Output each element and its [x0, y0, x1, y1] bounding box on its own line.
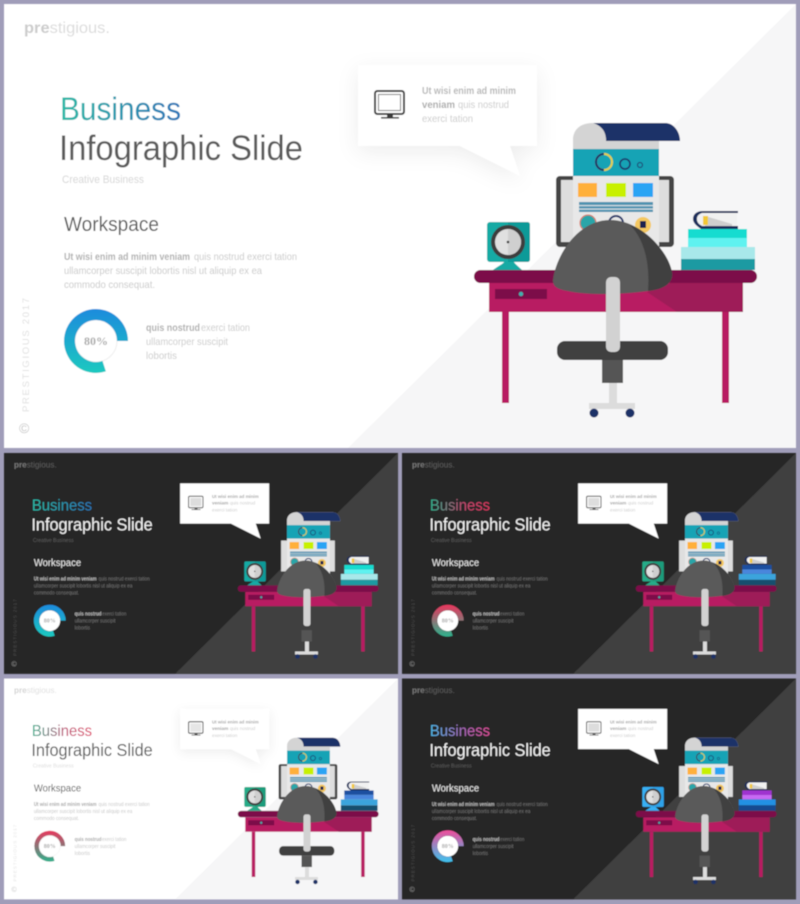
bubble text: Ut wisi enim ad minim — [610, 719, 657, 725]
diagonal background panel — [175, 678, 398, 899]
icon: monitor — [587, 496, 601, 510]
donut caption — [473, 837, 524, 857]
slide 3: dark red-green slide — [402, 453, 796, 674]
title: Business: Business — [430, 723, 490, 740]
subtitle: Creative Business — [431, 538, 472, 544]
title: Business: Business — [32, 723, 92, 740]
copyright mark: © — [19, 420, 30, 436]
donut caption: lobortis — [473, 851, 488, 857]
heading: Workspace: Workspace — [34, 558, 82, 569]
title: Business: Business — [430, 498, 490, 515]
bubble text: Ut wisi enim ad minim — [610, 494, 657, 500]
slide 5: dark pink-blue slide — [402, 678, 796, 899]
donut chart 80% — [70, 315, 122, 368]
slide 1: large light slide — [4, 4, 796, 448]
bubble text: quis nostrud — [230, 726, 255, 732]
donut chart 80% — [37, 607, 63, 634]
bubble text: quis nostrud — [628, 726, 653, 732]
illustration: desk, computer, chair, clock and books — [238, 512, 379, 659]
body paragraph: quis nostrud exerci tation — [497, 802, 548, 808]
icon: monitor — [375, 91, 404, 119]
body paragraph — [34, 802, 150, 822]
illustration: desk, computer, chair, clock and books — [636, 738, 777, 884]
body paragraph: commodo consequat. — [432, 590, 477, 596]
copyright mark: © — [409, 886, 415, 894]
donut caption: ullamcorper suscipit — [75, 619, 116, 625]
illustration: desk, computer, chair, clock and books — [636, 512, 777, 659]
slide background — [402, 453, 796, 674]
diagonal background panel — [573, 678, 796, 899]
bubble text: exerci tation — [610, 508, 636, 514]
donut caption — [473, 612, 524, 632]
copyright mark: © — [409, 660, 415, 668]
logo: prestigious. — [412, 686, 455, 695]
bubble text — [212, 719, 259, 739]
title: Infographic Slide: Infographic Slide — [31, 740, 153, 760]
donut caption — [75, 837, 126, 857]
bubble text: veniam — [212, 726, 229, 732]
bubble text: quis nostrud — [628, 501, 653, 507]
speech bubble — [358, 65, 537, 176]
body paragraph: Ut wisi enim ad minim veniam — [432, 576, 495, 582]
body paragraph — [34, 576, 150, 596]
vertical side label: PRESTIGIOUS 2017 — [410, 599, 416, 656]
body paragraph: quis nostrud exerci tation — [194, 251, 297, 263]
donut caption — [146, 322, 250, 362]
donut caption: quis nostrud — [75, 837, 102, 843]
vertical side label: PRESTIGIOUS 2017 — [410, 824, 416, 881]
logo: prestigious. — [412, 460, 455, 469]
body paragraph — [432, 576, 548, 596]
body paragraph: commodo consequat. — [432, 816, 477, 822]
donut caption: lobortis — [473, 626, 488, 632]
heading: Workspace: Workspace — [64, 214, 159, 236]
donut caption: quis nostrud — [473, 612, 500, 618]
speech bubble — [578, 483, 667, 539]
donut caption: ullamcorper suscipit — [473, 844, 514, 850]
donut caption: quis nostrud — [146, 322, 200, 334]
slide background — [402, 678, 796, 899]
donut caption: exerci tation — [500, 837, 524, 843]
donut caption: lobortis — [146, 350, 177, 362]
body paragraph: quis nostrud exerci tation — [99, 576, 150, 582]
donut caption: exerci tation — [102, 837, 126, 843]
vertical side label: PRESTIGIOUS 2017 — [12, 824, 18, 881]
donut caption: ullamcorper suscipit — [75, 844, 116, 850]
bubble text: exerci tation — [212, 508, 238, 514]
subtitle: Creative Business — [431, 764, 472, 770]
donut chart 80%: 80% — [84, 334, 108, 348]
donut chart 80%: 80% — [44, 844, 56, 850]
slide background — [4, 4, 796, 448]
body paragraph: ullamcorper suscipit lobortis nisl ut aliquip ex ea — [64, 265, 262, 277]
logo: prestigious. — [24, 20, 110, 37]
icon: monitor — [587, 722, 601, 736]
bubble text — [212, 494, 259, 514]
bubble text: Ut wisi enim ad minim — [212, 494, 259, 500]
body paragraph: quis nostrud exerci tation — [99, 802, 150, 808]
donut caption: exerci tation — [201, 322, 250, 334]
bubble text — [610, 494, 657, 514]
bubble text: Ut wisi enim ad minim — [422, 86, 516, 97]
speech bubble — [578, 709, 667, 764]
bubble text: veniam — [610, 726, 627, 732]
subtitle: Creative Business — [33, 538, 74, 544]
donut caption: ullamcorper suscipit — [146, 336, 228, 348]
body paragraph: Ut wisi enim ad minim veniam — [64, 251, 190, 263]
copyright mark: © — [11, 886, 17, 894]
logo: prestigious. — [14, 686, 57, 695]
body paragraph: quis nostrud exerci tation — [497, 576, 548, 582]
subtitle: Creative Business — [33, 764, 74, 770]
donut caption — [75, 612, 126, 632]
donut chart 80%: 80% — [442, 844, 454, 850]
title: Infographic Slide: Infographic Slide — [429, 740, 551, 760]
bubble text: Ut wisi enim ad minim — [212, 719, 259, 725]
body paragraph: Ut wisi enim ad minim veniam — [34, 576, 97, 582]
slide 2: dark teal slide — [4, 453, 398, 674]
slide background — [4, 678, 398, 899]
body paragraph: commodo consequat. — [34, 816, 79, 822]
slide background — [4, 453, 398, 674]
body paragraph: Ut wisi enim ad minim veniam — [432, 802, 495, 808]
bubble text: veniam — [422, 100, 455, 111]
diagonal background panel — [573, 453, 796, 674]
bubble text: quis nostrud — [458, 100, 509, 111]
donut chart 80%: 80% — [44, 619, 56, 625]
heading: Workspace: Workspace — [432, 558, 480, 569]
donut chart 80% — [435, 607, 461, 634]
bubble text — [422, 86, 516, 125]
body paragraph — [64, 251, 297, 291]
donut caption: quis nostrud — [75, 612, 102, 618]
donut caption: quis nostrud — [473, 837, 500, 843]
diagonal background panel — [348, 4, 796, 448]
slide 4: light red-green slide — [4, 678, 398, 899]
bubble text — [610, 719, 657, 739]
donut caption: ullamcorper suscipit — [473, 619, 514, 625]
title: Business: Business — [60, 91, 181, 127]
illustration: desk, computer, chair, clock and books — [238, 738, 379, 884]
bubble text: veniam — [212, 501, 229, 507]
donut caption: exerci tation — [102, 612, 126, 618]
bubble text: exerci tation — [212, 733, 238, 739]
title: Business: Business — [32, 498, 92, 515]
vertical side label: PRESTIGIOUS 2017 — [21, 298, 32, 412]
body paragraph: commodo consequat. — [34, 590, 79, 596]
icon: monitor — [189, 496, 203, 510]
copyright mark: © — [11, 660, 17, 668]
heading: Workspace: Workspace — [34, 783, 82, 794]
speech bubble — [180, 483, 269, 539]
body paragraph: ullamcorper suscipit lobortis nisl ut aliquip ex ea — [432, 809, 530, 815]
title: Infographic Slide: Infographic Slide — [59, 129, 303, 168]
body paragraph — [432, 802, 548, 822]
body paragraph: commodo consequat. — [64, 279, 155, 291]
donut chart 80% — [37, 833, 63, 859]
logo: prestigious. — [14, 460, 57, 469]
body paragraph: ullamcorper suscipit lobortis nisl ut aliquip ex ea — [432, 583, 530, 589]
donut caption: lobortis — [75, 626, 90, 632]
bubble text: quis nostrud — [230, 501, 255, 507]
body paragraph: ullamcorper suscipit lobortis nisl ut aliquip ex ea — [34, 583, 132, 589]
bubble text: exerci tation — [422, 114, 473, 125]
body paragraph: ullamcorper suscipit lobortis nisl ut aliquip ex ea — [34, 809, 132, 815]
diagonal background panel — [175, 453, 398, 674]
body paragraph: Ut wisi enim ad minim veniam — [34, 802, 97, 808]
heading: Workspace: Workspace — [432, 783, 480, 794]
icon: monitor — [189, 722, 203, 736]
subtitle: Creative Business — [62, 174, 144, 186]
speech bubble — [180, 709, 269, 764]
vertical side label: PRESTIGIOUS 2017 — [12, 599, 18, 656]
donut caption: exerci tation — [500, 612, 524, 618]
illustration: desk, computer, chair, clock and books — [474, 123, 757, 418]
title: Infographic Slide: Infographic Slide — [31, 515, 153, 535]
donut chart 80% — [435, 833, 461, 859]
bubble text: exerci tation — [610, 733, 636, 739]
bubble text: veniam — [610, 501, 627, 507]
donut chart 80%: 80% — [442, 619, 454, 625]
donut caption: lobortis — [75, 851, 90, 857]
title: Infographic Slide: Infographic Slide — [429, 515, 551, 535]
